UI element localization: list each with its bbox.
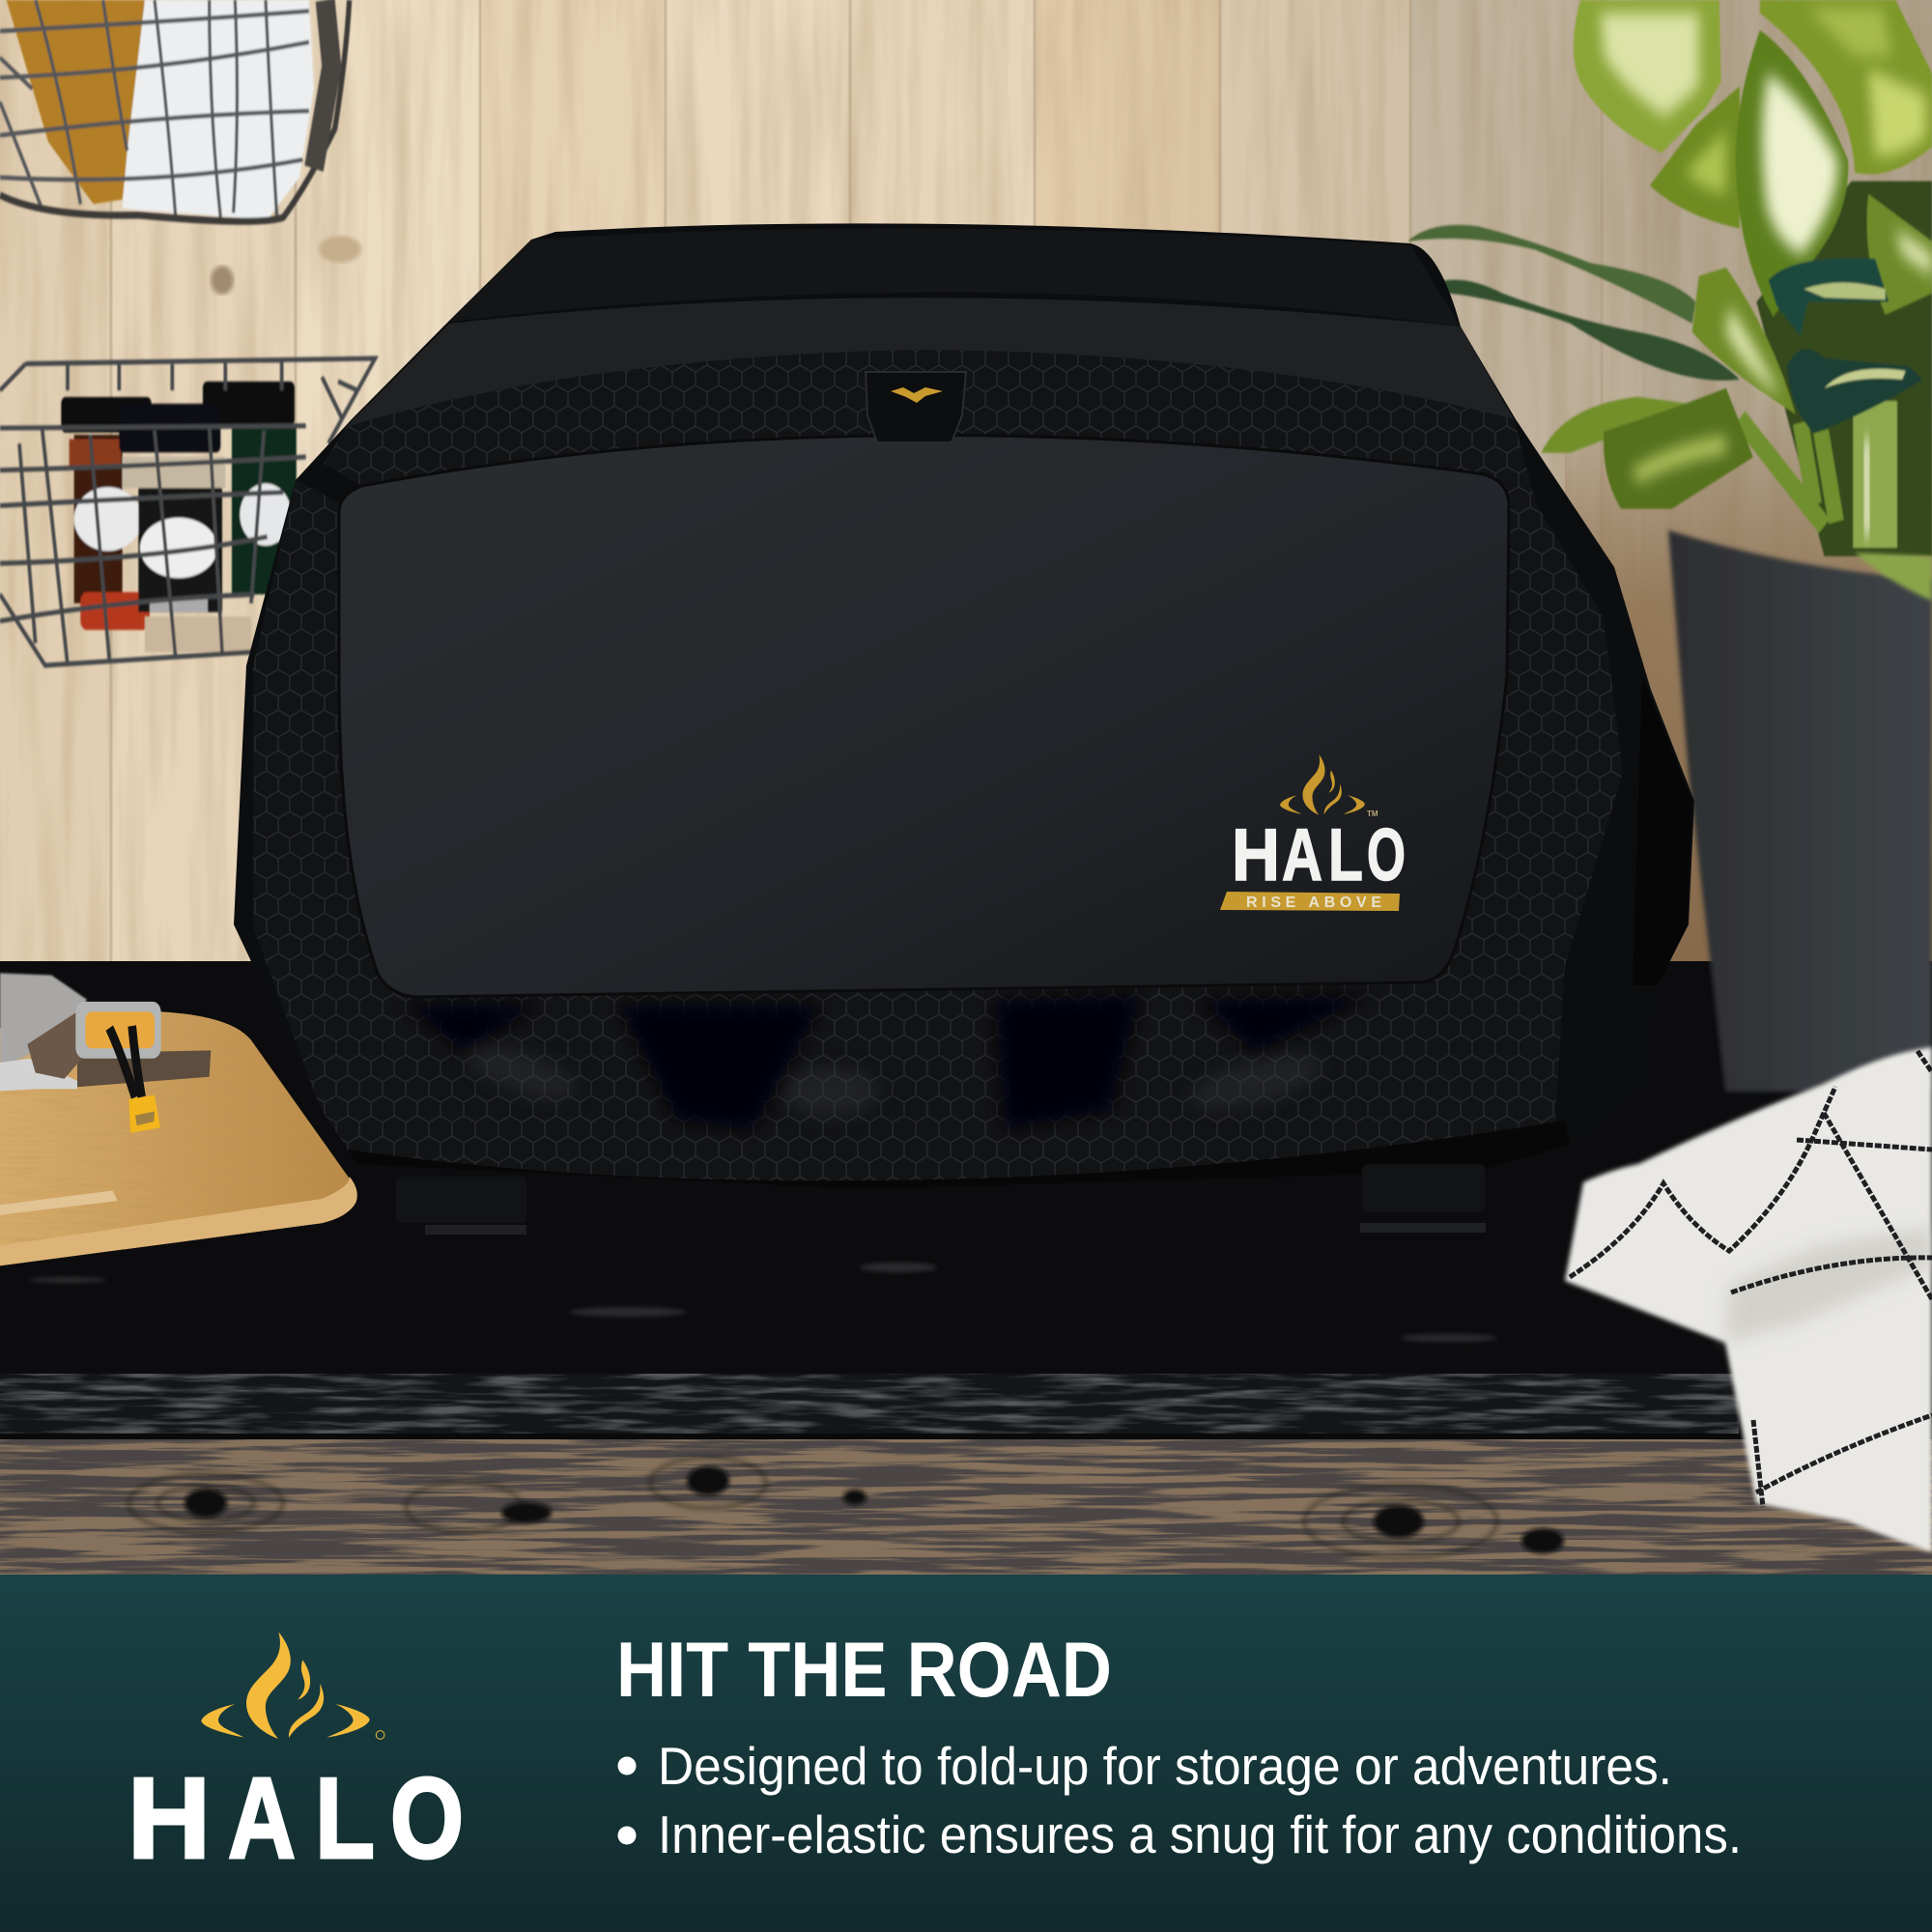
wordmark HALO: L [315, 1754, 375, 1883]
icon: flame [201, 1632, 384, 1739]
lower left leaf [1542, 397, 1686, 453]
folded bag [234, 223, 1694, 1189]
bench surface scuffs [29, 1263, 1497, 1342]
embroidered flame [1280, 754, 1365, 815]
thin lower leaf [1421, 280, 1740, 381]
dark teal leaf [1787, 349, 1922, 434]
black cords [109, 1026, 142, 1097]
top wire basket [0, 0, 350, 221]
handle head [75, 1002, 161, 1059]
brand logo [128, 1632, 464, 1883]
skirt shadows [406, 995, 1372, 1130]
dark bar [77, 1050, 211, 1087]
embroidered logo on bag [1220, 754, 1406, 911]
rear top panel [449, 228, 1461, 327]
basket frame [0, 0, 350, 221]
central large leaf [1736, 30, 1848, 317]
background: wooden plank wall [0, 0, 1932, 976]
big top-left leaf [1574, 0, 1721, 153]
left honeycomb side [253, 480, 502, 1164]
right jar [203, 382, 297, 594]
right edge leaf [1867, 194, 1932, 315]
wordmark HALO [128, 1754, 464, 1883]
bench top [0, 961, 1932, 1377]
mid leaf [1692, 268, 1796, 414]
elastic hem [348, 1121, 1570, 1189]
embroidered wordmark: L [1328, 814, 1363, 896]
bag feet straps [396, 1164, 1486, 1235]
second leaf [1650, 86, 1740, 229]
yellow tag [128, 1095, 160, 1133]
right honeycomb side [1401, 473, 1623, 1150]
embroidered wordmark: H [1232, 814, 1280, 896]
embroidered wordmark: O [1367, 814, 1406, 896]
cutting board [0, 973, 357, 1265]
main front panel [339, 436, 1509, 997]
center jar [119, 404, 251, 652]
tagline: RISE ABOVE [1246, 895, 1381, 911]
upper right leaf [1760, 0, 1932, 174]
lower honeycomb skirt [357, 980, 1565, 1189]
mustard cutting board in basket [7, 0, 145, 204]
towel fold shadow [1725, 1227, 1932, 1343]
board top [0, 1011, 351, 1247]
bullet list [618, 1736, 1742, 1864]
bag silhouette [234, 223, 1694, 1189]
leaf draped over pot [1855, 553, 1932, 601]
left jar [61, 397, 152, 630]
gold bar [1220, 892, 1400, 911]
white towel in basket [123, 0, 314, 219]
right bag strap shadow [1633, 676, 1692, 985]
plant leaves and stems [1407, 0, 1932, 556]
heading: HIT THE ROAD [616, 1627, 1112, 1714]
handle body [27, 1011, 84, 1079]
basket wires [0, 358, 375, 666]
buckle tab [866, 372, 966, 442]
bench front plank [0, 1374, 1739, 1440]
plant pot [1668, 530, 1932, 1092]
silver strip [0, 1059, 77, 1091]
plant stems [1740, 418, 1836, 526]
bullet 1: Designed to fold-up for storage or adventures. [658, 1736, 1672, 1796]
wordmark HALO: A [228, 1754, 296, 1883]
embroidered wordmark [1232, 814, 1406, 896]
wood knots [128, 1458, 1497, 1558]
skirt highlights [461, 1035, 1326, 1120]
board grain [8, 1093, 33, 1240]
bullet 2: Inner-elastic ensures a snug fit for any conditions. [658, 1804, 1742, 1864]
lower center leaf [1604, 388, 1753, 509]
wordmark HALO: O [390, 1754, 464, 1883]
dark plant interior [1756, 181, 1932, 556]
embroidered wordmark: A [1282, 814, 1322, 896]
trademark: TM [1367, 810, 1378, 818]
towel check lines [1570, 1051, 1932, 1507]
towel [1565, 1047, 1932, 1552]
orange inset [85, 1011, 155, 1048]
lower wire basket with jars [0, 358, 375, 666]
panel: bottom teal band [0, 1575, 1932, 1932]
wordmark HALO: H [128, 1754, 211, 1883]
board groove [0, 1191, 118, 1215]
basket wires [0, 0, 309, 217]
honeycomb band under flap [324, 350, 1536, 502]
teal leaf [1769, 258, 1889, 336]
top fold flap [346, 298, 1514, 427]
board edge [0, 1177, 357, 1265]
thin upper leaf [1407, 225, 1695, 324]
lower rustic wood plank [0, 1439, 1932, 1575]
grey blade [0, 973, 87, 1068]
